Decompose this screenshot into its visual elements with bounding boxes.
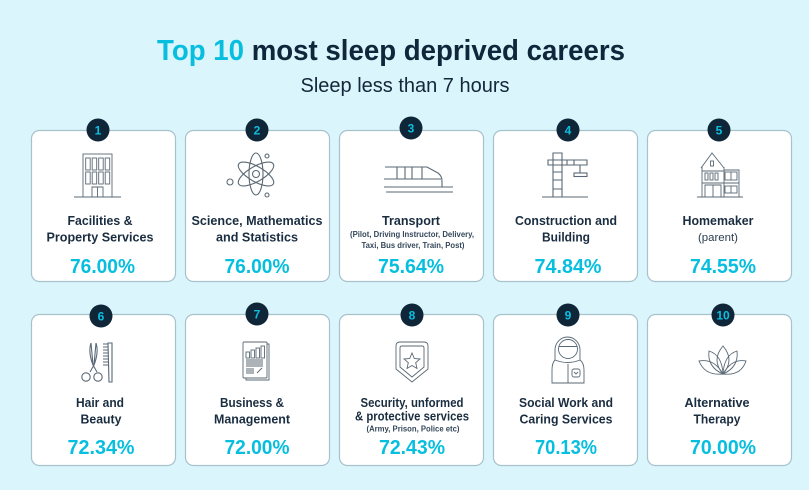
label <box>76 395 124 426</box>
badge: 4 <box>556 118 580 142</box>
icon: train <box>384 167 453 192</box>
label: Security, unformed <box>360 395 464 410</box>
badge: 2 <box>246 118 268 142</box>
label: Management <box>214 412 291 426</box>
icon: scissors and comb <box>82 343 112 382</box>
value: 72.43% <box>379 437 445 459</box>
label: Taxi, Bus driver, Train, Post) <box>362 241 465 250</box>
badge: 3 <box>400 116 422 140</box>
panel: Social Work and Caring Services <box>494 304 638 466</box>
value: 75.64% <box>378 256 444 278</box>
badge: 8 <box>400 304 424 326</box>
label: Hair and <box>76 395 124 410</box>
panel: Business & Management <box>186 302 330 466</box>
badge: 4: 4 <box>565 124 572 138</box>
panel: Science, Mathematics and Statistics <box>186 118 330 282</box>
label: Property Services <box>46 230 154 244</box>
badge: 7 <box>246 302 268 326</box>
icon: care worker <box>552 337 584 383</box>
panel: Alternative Therapy <box>648 304 792 466</box>
label <box>515 213 617 244</box>
icon: lotus <box>699 346 746 374</box>
panel: Homemaker <box>648 118 792 282</box>
value: 76.00% <box>224 256 290 278</box>
label: Alternative <box>684 395 750 410</box>
label <box>192 213 322 244</box>
label <box>214 395 291 426</box>
panel: Security, unformed & protective services <box>340 304 484 466</box>
panel: Transport <box>340 116 484 282</box>
badge: 8: 8 <box>409 308 416 322</box>
icon: crane <box>542 153 588 197</box>
value: 70.13% <box>535 437 597 459</box>
badge: 10: 10 <box>716 308 730 322</box>
value: 72.00% <box>224 437 290 459</box>
label: Facilities & <box>68 213 132 228</box>
icon: atom <box>227 153 277 197</box>
label: Business & <box>220 395 284 410</box>
badge: 3: 3 <box>408 122 415 136</box>
badge: 10 <box>712 304 734 326</box>
icon: shield with star <box>396 342 428 382</box>
label: Homemaker <box>682 213 754 228</box>
badge: 5 <box>708 118 730 142</box>
label <box>355 395 469 434</box>
title: Top 10 most sleep deprived careers <box>157 35 625 67</box>
label: Construction and <box>515 213 617 228</box>
label: Caring Services <box>520 412 612 426</box>
label <box>519 395 613 426</box>
badge: 9: 9 <box>565 308 572 322</box>
badge: 6: 6 <box>98 310 105 324</box>
subtitle: Sleep less than 7 hours <box>300 75 510 97</box>
badge: 2: 2 <box>254 124 261 138</box>
label: & protective services <box>355 408 469 424</box>
value: 74.84% <box>534 256 602 278</box>
label: (Army, Prison, Police etc) <box>366 424 460 434</box>
badge: 1: 1 <box>95 124 102 138</box>
label <box>684 395 750 426</box>
icon: house <box>697 153 743 197</box>
label: Therapy <box>694 412 741 426</box>
value: 74.55% <box>690 256 756 278</box>
label: Beauty <box>80 412 122 426</box>
label: (parent) <box>698 232 738 244</box>
label: Building <box>542 230 590 244</box>
icon: office building <box>74 154 121 197</box>
panel: Facilities & Property Services <box>32 118 176 282</box>
value: 70.00% <box>690 437 756 459</box>
panel: Hair and Beauty <box>32 304 176 466</box>
value: 72.34% <box>68 437 135 459</box>
badge: 6 <box>90 304 112 328</box>
badge: 9 <box>556 304 580 326</box>
panel: Construction and Building <box>494 118 638 282</box>
label: Science, Mathematics <box>192 213 322 228</box>
label: and Statistics <box>216 230 298 244</box>
label <box>46 213 154 244</box>
value: 76.00% <box>70 256 135 278</box>
label: (Pilot, Driving Instructor, Delivery, <box>350 230 474 239</box>
label: Transport <box>382 213 441 228</box>
badge: 7: 7 <box>254 308 261 322</box>
badge: 1 <box>86 118 110 142</box>
label <box>682 213 754 244</box>
label: Social Work and <box>519 395 613 410</box>
badge: 5: 5 <box>716 124 723 138</box>
icon: report document <box>243 342 269 380</box>
label <box>350 213 474 250</box>
